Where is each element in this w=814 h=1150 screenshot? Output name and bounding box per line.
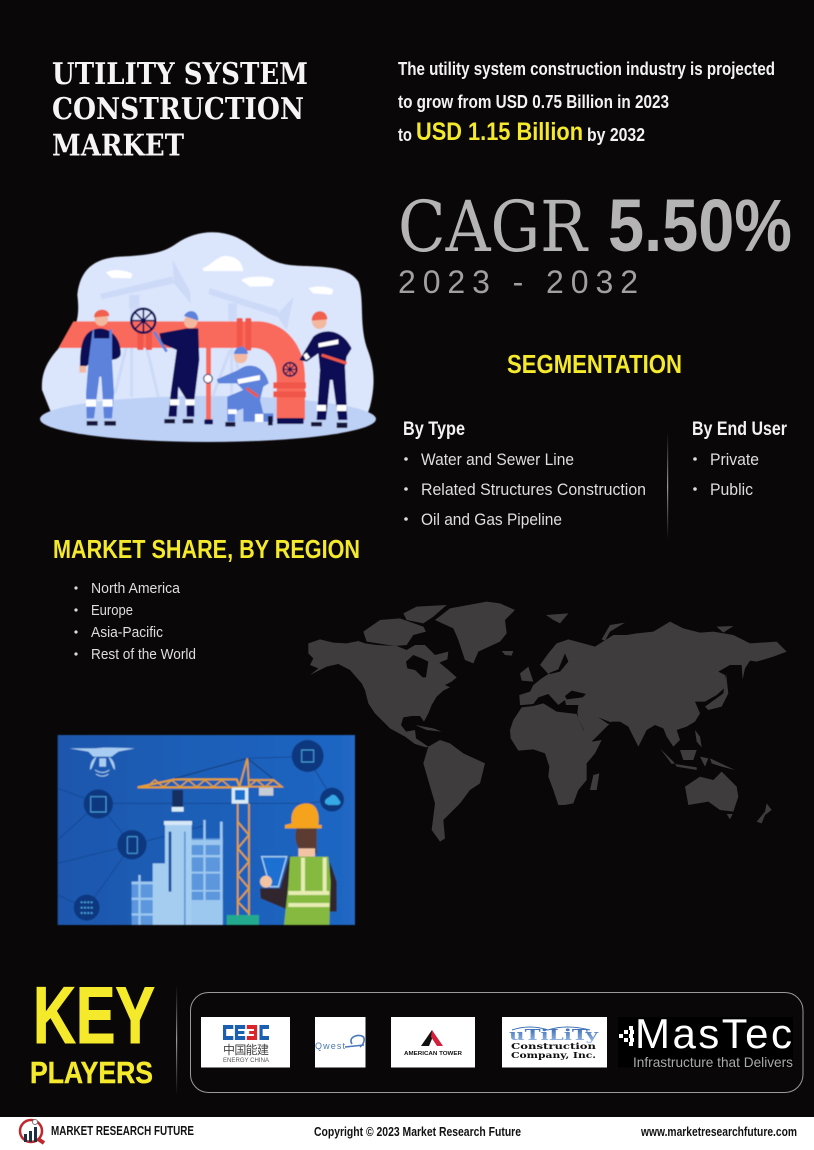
logo: energy china: ENERGY CHINA (223, 1058, 269, 1064)
segmentation: by type: By Type (403, 419, 465, 440)
logo: energy china (201, 1017, 290, 1068)
region list: Rest of the World (91, 646, 196, 663)
worker 4 (299, 311, 352, 428)
footer: brand name: MARKET RESEARCH FUTURE (51, 1124, 194, 1138)
footer (0, 1117, 814, 1150)
drone (69, 748, 135, 776)
logo: mastec: MasTec (635, 1010, 792, 1057)
footer logo: magnifier with bars (20, 1120, 44, 1143)
segmentation: by end user: Private (710, 450, 759, 469)
illustration: pipeline workers (40, 232, 376, 442)
text block: market projection: to (398, 125, 412, 145)
CAGR figure: CAGR (398, 186, 589, 268)
world map (308, 602, 787, 842)
text block: market projection: to grow from USD 0.75 Billion in 2023 (398, 92, 669, 112)
worker with tablet (260, 803, 337, 925)
text block: market projection (398, 59, 775, 146)
worker 2 (154, 311, 199, 423)
heading: market share by region: MARKET SHARE, BY REGION (53, 534, 360, 564)
segmentation: by type: Related Structures Construction (421, 480, 646, 499)
logo: mastec: Infrastructure that Delivers (633, 1054, 793, 1070)
red pipe (58, 318, 306, 420)
footer: copyright: Copyright © 2023 Market Research Future (314, 1125, 521, 1139)
region list: North America (91, 580, 181, 597)
heading: segmentation: SEGMENTATION (507, 349, 682, 379)
heading: key players: KEY (33, 971, 155, 1061)
title: CONSTRUCTION (52, 92, 304, 127)
segmentation: by end user (692, 419, 788, 499)
segmentation: by type: Oil and Gas Pipeline (421, 510, 562, 529)
CAGR figure: 2023 - 2032 (398, 264, 638, 300)
heading: key players (30, 971, 155, 1090)
logo: energy china: 中国能建 (223, 1042, 269, 1057)
text block: market projection: USD 1.15 Billion (416, 118, 583, 146)
segmentation: by type: Water and Sewer Line (421, 450, 574, 469)
CAGR figure: 5.50% (608, 184, 792, 267)
region list: Asia-Pacific (91, 624, 163, 641)
logo: qwest (315, 1017, 366, 1068)
tower crane (138, 758, 282, 925)
segmentation: by end user: By End User (692, 419, 788, 440)
buildings (132, 820, 223, 925)
illustration: construction technology (58, 735, 355, 925)
title (52, 57, 308, 164)
panel: key player logos (190, 992, 803, 1092)
tech node icons (74, 740, 344, 921)
logo: american tower: AMERICAN TOWER (404, 1051, 462, 1057)
CAGR figure (398, 184, 792, 300)
logo: utility construction company: Company, Inc. (511, 1050, 596, 1060)
logo: utility construction company: Construction (511, 1041, 596, 1051)
region list (74, 580, 196, 663)
heading: key players: PLAYERS (30, 1056, 153, 1090)
worker 3 (217, 347, 273, 427)
logo: qwest: Qwest (315, 1041, 345, 1051)
oil pump jacks (100, 260, 293, 397)
segmentation: by end user: Public (710, 480, 753, 499)
worker 1 (79, 310, 121, 426)
logo: utility construction company (502, 1017, 607, 1068)
segmentation: by type (403, 419, 646, 529)
region list: Europe (91, 602, 133, 619)
text block: market projection: by 2032 (587, 125, 645, 145)
logo: utility construction company: uTiLiTy (509, 1026, 600, 1044)
title: MARKET (52, 128, 185, 164)
title: UTILITY SYSTEM (52, 57, 308, 92)
logo: american tower (391, 1017, 475, 1068)
